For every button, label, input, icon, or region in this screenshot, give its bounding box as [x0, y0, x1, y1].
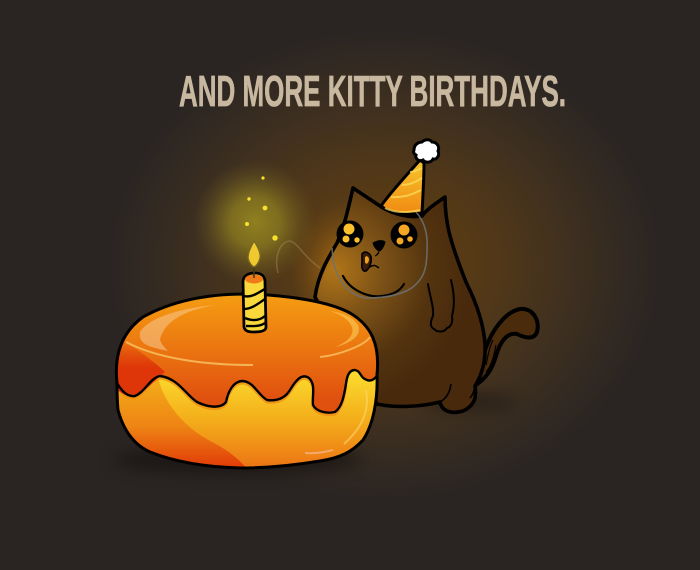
cake body — [116, 294, 378, 468]
flame — [248, 241, 260, 267]
icing highlights — [126, 342, 253, 365]
wick — [253, 265, 255, 278]
cat foot line — [440, 384, 475, 402]
mouth — [362, 252, 371, 271]
cat tail — [476, 309, 538, 385]
icing red corner — [118, 342, 165, 396]
candle glow — [193, 160, 317, 284]
cake lower shade — [118, 378, 245, 466]
cat shadow — [424, 395, 516, 409]
candle — [243, 241, 266, 332]
cat smile — [343, 276, 404, 296]
warm background glow — [110, 30, 660, 500]
cake — [114, 292, 380, 470]
cake outline — [116, 294, 378, 468]
hat string — [332, 212, 427, 298]
icing glow — [117, 378, 346, 415]
cat body — [315, 188, 485, 412]
pompom — [414, 140, 439, 162]
cat — [315, 140, 538, 412]
party hat — [381, 160, 424, 214]
cat arm — [428, 280, 454, 332]
nose — [373, 241, 385, 256]
cake shadow — [113, 447, 363, 473]
sparks — [245, 176, 278, 241]
candle body — [243, 273, 266, 332]
icing edge — [117, 370, 378, 413]
cat orange glow — [290, 200, 400, 340]
candle top — [245, 274, 263, 284]
left eye — [336, 220, 364, 248]
icing — [118, 296, 376, 412]
smoke — [277, 241, 320, 273]
candle stripes — [244, 289, 265, 326]
right eye — [390, 222, 418, 248]
